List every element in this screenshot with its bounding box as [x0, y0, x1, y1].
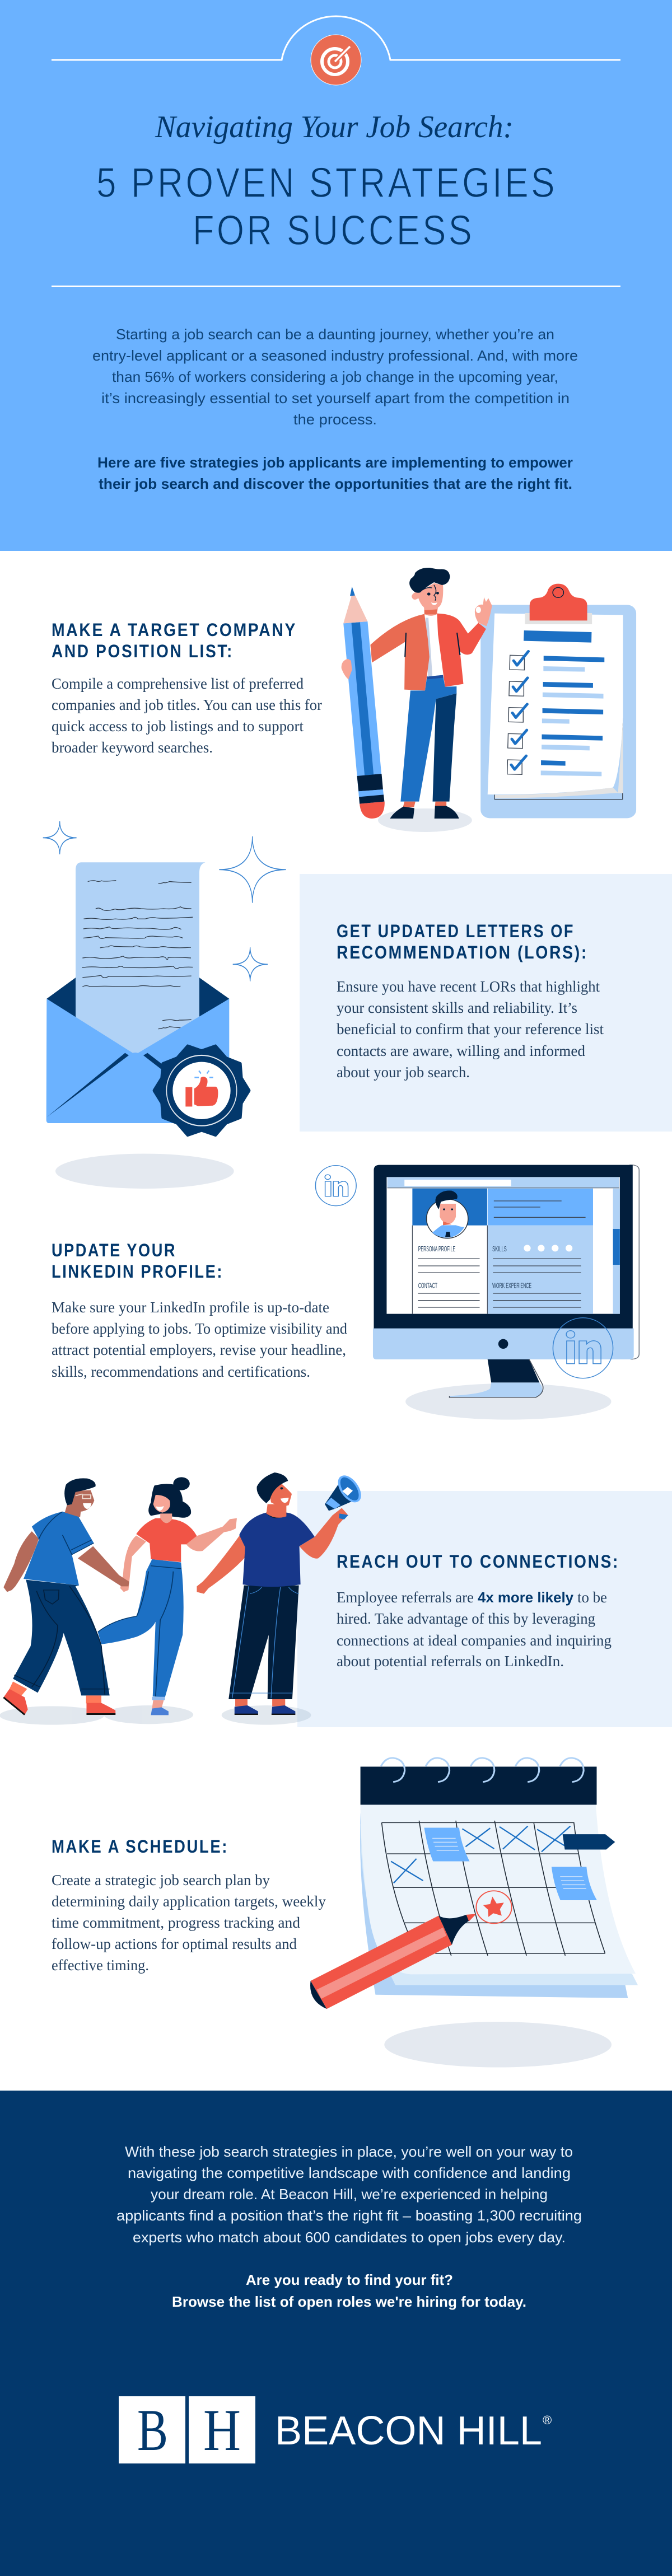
title: Navigating Your Job Search:: [155, 110, 514, 144]
panel: linkedin profile text: attract potential employers, revise your headline,: [52, 1341, 346, 1358]
panel: reach out to connections: Employee referrals are: [337, 1589, 474, 1606]
panel: target company list text: [52, 620, 322, 756]
intro call to action: Here are five strategies job applicants are implementing to empower: [97, 454, 573, 471]
panel: linkedin profile text: LINKEDIN PROFILE:: [52, 1261, 223, 1282]
panel: make a schedule text: determining daily application targets, weekly: [52, 1893, 326, 1910]
panel: reach out to connections: connections at ideal companies and inquiring: [337, 1632, 612, 1649]
sticky notes: [424, 1828, 597, 1900]
intro text: than 56% of workers considering a job change in the upcoming year,: [112, 368, 558, 385]
screen: PERSONA PROFILE: [418, 1245, 455, 1253]
closing text: navigating the competitive landscape with confidence and landing: [128, 2164, 571, 2181]
panel: target company list text: MAKE A TARGET COMPANY: [52, 620, 297, 640]
intro text: [92, 326, 578, 428]
woman: [98, 1477, 237, 1715]
icon: starred date: [476, 1891, 512, 1923]
panel: letters of recommendation: beneficial to confirm that your reference list: [337, 1021, 604, 1037]
badge: [154, 1046, 249, 1135]
calendar rings: [381, 1758, 584, 1782]
panel: letters of recommendation: about your job search.: [337, 1064, 470, 1081]
panel: reach out to connections: [297, 1491, 672, 1727]
panel: footer: [0, 2091, 672, 2576]
illustration: man with pencil and clipboard: [342, 568, 636, 832]
intro call to action: their job search and discover the opportunities that are the right fit.: [99, 475, 572, 492]
title: 5 PROVEN STRATEGIES: [96, 159, 557, 206]
icon: large linkedin: [553, 1318, 613, 1378]
panel: header: [0, 0, 672, 551]
panel: target company list text: companies and job titles. You can use this for: [52, 696, 322, 713]
pencil: [342, 587, 385, 819]
man with megaphone: [197, 1472, 364, 1715]
illustration: monitor with linkedin profile: [315, 1165, 639, 1420]
screen: SKILLS: [492, 1245, 507, 1253]
closing text: applicants find a position that’s the right fit – boasting 1,300 recruiting: [116, 2207, 582, 2224]
illustration: three people with megaphone: [0, 1472, 364, 1725]
call to action: Browse the list of open roles we're hiring for today.: [172, 2293, 526, 2310]
panel: letters of recommendation: [300, 874, 672, 1132]
panel: reach out to connections: to be: [577, 1589, 607, 1606]
intro text: it’s increasingly essential to set yourself apart from the competition in: [101, 390, 570, 406]
screen: [386, 1177, 620, 1314]
panel: linkedin profile text: [52, 1240, 347, 1380]
panel: letters of recommendation: RECOMMENDATION (LORS):: [337, 942, 588, 962]
icon: megaphone: [325, 1474, 364, 1520]
panel: make a schedule text: time commitment, progress tracking and: [52, 1914, 300, 1931]
panel: reach out to connections: about potential referrals on LinkedIn.: [337, 1653, 564, 1670]
panel: make a schedule text: MAKE A SCHEDULE:: [52, 1836, 228, 1857]
panel: target company list text: broader keyword searches.: [52, 739, 213, 756]
logo: Beacon Hill: [119, 2396, 552, 2463]
logo: Beacon Hill: BEACON HILL: [275, 2409, 542, 2453]
sparkles: [43, 821, 286, 981]
intro text: the process.: [293, 411, 377, 428]
man: [370, 568, 492, 819]
calendar grid: [382, 1821, 605, 1956]
panel: letters of recommendation: GET UPDATED LETTERS OF: [337, 921, 575, 941]
intro call to action: [97, 454, 573, 492]
panel: reach out to connections: hired. Take advantage of this by leveraging: [337, 1610, 595, 1627]
panel: target company list text: quick access to job listings and to support: [52, 718, 304, 735]
panel: reach out to connections: 4x more likely: [478, 1589, 574, 1606]
title: [96, 110, 557, 254]
panel: make a schedule text: effective timing.: [52, 1957, 149, 1974]
panel: target company list text: Compile a comprehensive list of preferred: [52, 675, 304, 692]
logo: Beacon Hill: B: [137, 2397, 168, 2463]
closing text: your dream role. At Beacon Hill, we’re experienced in helping: [151, 2186, 548, 2203]
icon: target: [311, 35, 361, 85]
title: FOR SUCCESS: [193, 207, 474, 254]
letter: [76, 862, 206, 1057]
avatar: [427, 1190, 468, 1238]
closing text: [116, 2143, 582, 2246]
panel: letters of recommendation: contacts are aware, willing and informed: [337, 1042, 585, 1059]
logo: Beacon Hill: ®: [543, 2413, 552, 2427]
panel: linkedin profile text: UPDATE YOUR: [52, 1240, 176, 1260]
panel: linkedin profile text: before applying to jobs. To optimize visibility and: [52, 1320, 347, 1337]
illustration: envelope with letter and badge: [43, 821, 286, 1189]
intro text: Starting a job search can be a daunting journey, whether you’re an: [116, 326, 554, 343]
panel: make a schedule text: follow-up actions for optimal results and: [52, 1935, 297, 1952]
panel: letters of recommendation: your consistent skills and reliability. It’s: [337, 999, 577, 1016]
panel: reach out to connections: REACH OUT TO CONNECTIONS:: [337, 1551, 619, 1572]
icon: small linkedin: [315, 1166, 356, 1206]
envelope: [46, 999, 229, 1123]
panel: make a schedule text: [52, 1836, 326, 1974]
call to action: [172, 2271, 526, 2310]
screen: CONTACT: [418, 1282, 438, 1289]
panel: target company list text: AND POSITION LIST:: [52, 641, 234, 661]
marker: [310, 1914, 476, 2009]
intro text: entry-level applicant or a seasoned industry professional. And, with more: [92, 347, 578, 364]
closing text: With these job search strategies in place, you’re well on your way to: [125, 2143, 573, 2160]
logo: Beacon Hill: H: [203, 2397, 241, 2463]
panel: linkedin profile text: Make sure your LinkedIn profile is up-to-date: [52, 1299, 329, 1316]
illustration: calendar and marker: [310, 1758, 638, 2068]
call to action: Are you ready to find your fit?: [246, 2271, 453, 2288]
x marks: [391, 1826, 570, 1883]
closing text: experts who match about 600 candidates to open jobs every day.: [133, 2229, 566, 2246]
screen: WORK EXPERIENCE: [492, 1282, 531, 1289]
panel: linkedin profile text: skills, recommendations and certifications.: [52, 1363, 310, 1380]
panel: make a schedule text: Create a strategic job search plan by: [52, 1872, 270, 1888]
man with glasses: [3, 1478, 129, 1715]
panel: letters of recommendation: Ensure you have recent LORs that highlight: [337, 978, 600, 995]
